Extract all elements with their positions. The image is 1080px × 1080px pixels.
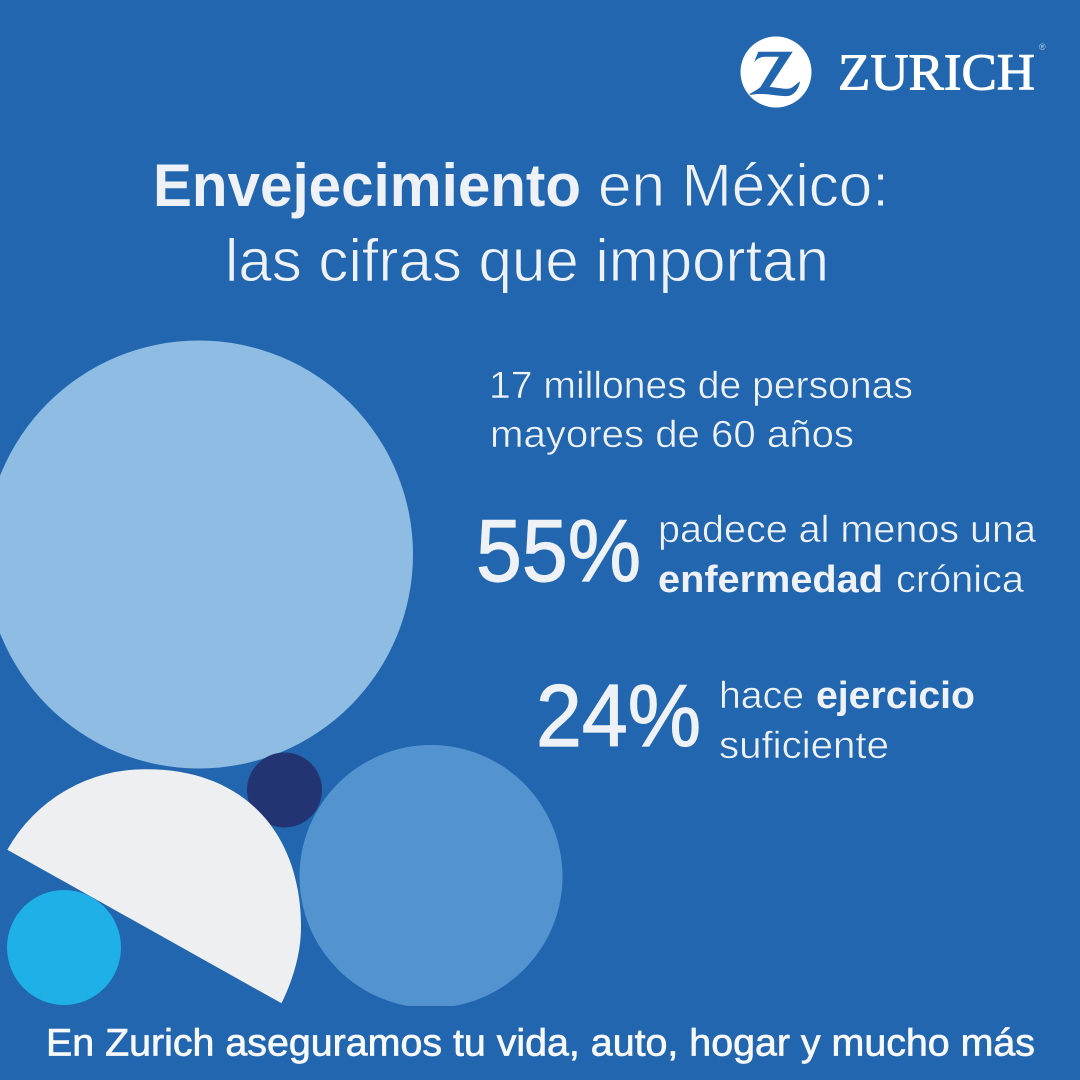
shape: cyan circle xyxy=(7,890,121,1005)
shape: dark navy circle xyxy=(247,752,322,828)
text block: 17 millones: mayores de 60 años xyxy=(490,414,854,456)
logo wordmark: ZURICH xyxy=(838,44,1035,102)
stat: 24%: ejercicio xyxy=(816,675,975,717)
logo: Zurich xyxy=(740,36,1046,108)
title: las cifras que importan xyxy=(225,227,829,294)
text block: 17 millones xyxy=(489,365,913,456)
shape: white semicircle xyxy=(7,769,301,1003)
shape: medium blue circle xyxy=(300,745,562,1008)
footer tagline: En Zurich aseguramos tu vida, auto, hogar y mucho más xyxy=(46,1022,1035,1064)
stat: 55%: enfermedad xyxy=(658,559,883,601)
stat: 55% xyxy=(476,501,1037,601)
shape: large light blue circle xyxy=(0,340,413,768)
stat: 24%: 24% xyxy=(536,666,701,765)
title xyxy=(153,152,889,294)
stat: 24% xyxy=(536,666,975,767)
registered mark: ® xyxy=(1039,42,1046,52)
stat: 55%: padece al menos una xyxy=(658,509,1037,551)
icon: Zurich Z emblem xyxy=(740,36,812,108)
stat: 24%: hace xyxy=(719,675,804,717)
stat: 55%: crónica xyxy=(896,559,1025,601)
stat: 55%: 55% xyxy=(476,501,641,600)
title: en México: xyxy=(598,152,889,219)
text block: 17 millones: 17 millones de personas xyxy=(489,365,913,407)
stat: 24%: suficiente xyxy=(719,725,889,767)
title: Envejecimiento xyxy=(153,152,581,219)
